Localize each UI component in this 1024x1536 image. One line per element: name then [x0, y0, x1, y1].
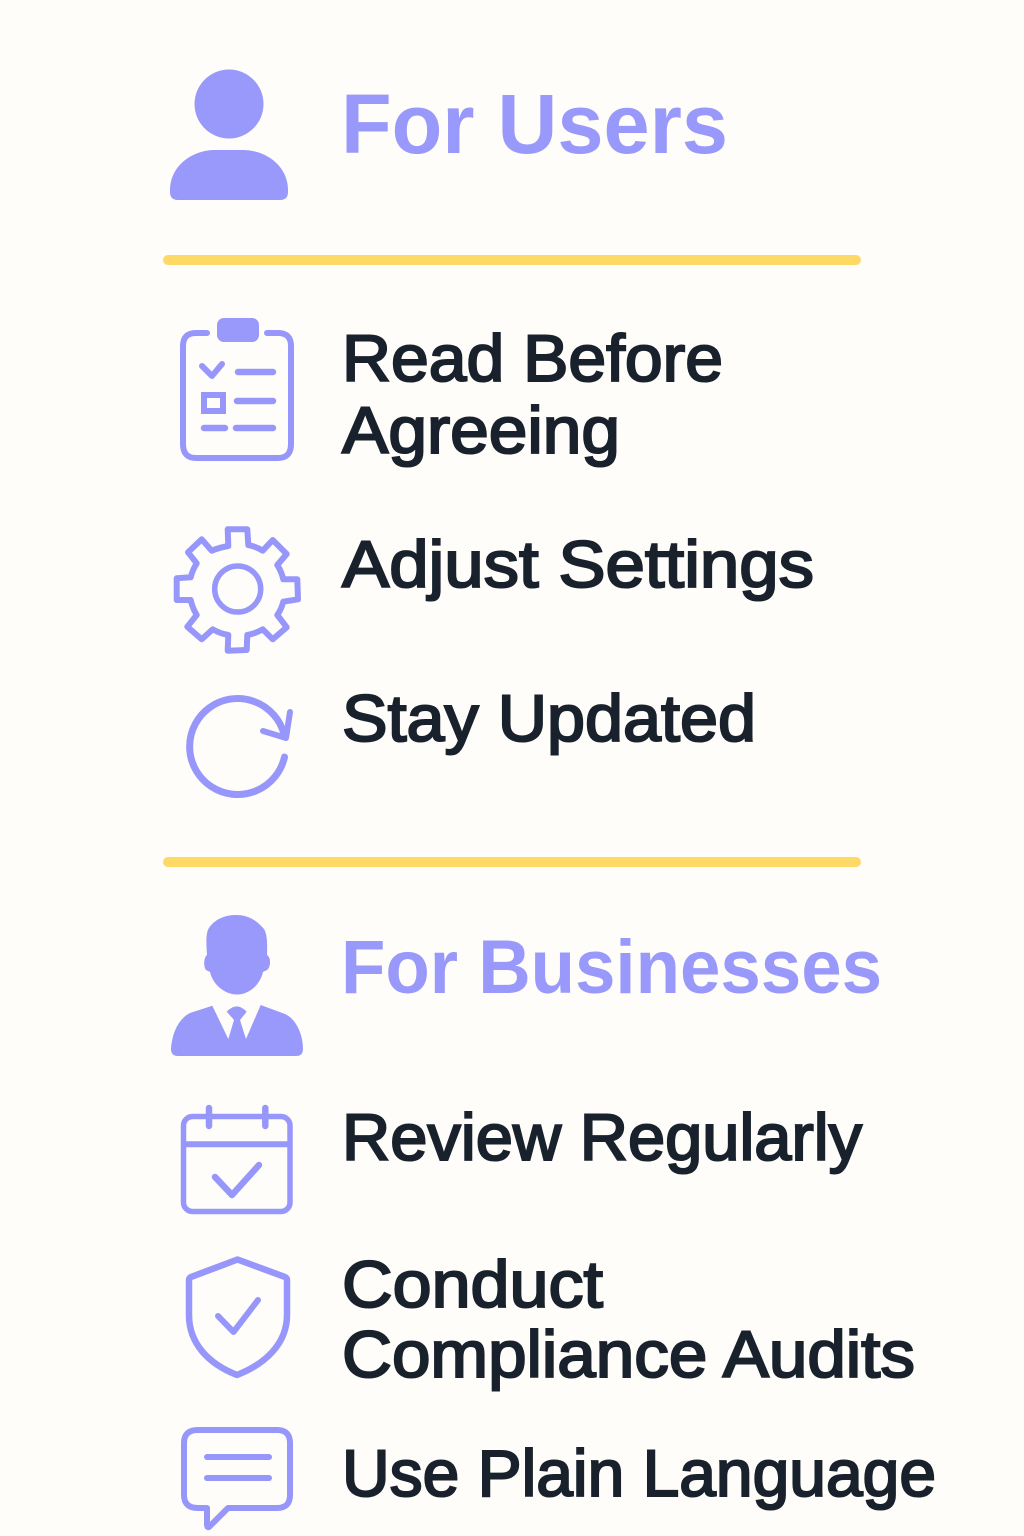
text: Read Before Agreeing: Read Before	[342, 321, 723, 395]
heading: For Users: For Users	[341, 77, 728, 171]
heading: For Businesses: For Businesses	[341, 925, 882, 1010]
icon: businessman	[171, 915, 303, 1056]
text: Read Before Agreeing: Agreeing	[342, 393, 620, 467]
text: Use Plain Language: Use Plain Language	[342, 1436, 936, 1510]
icon: user	[170, 70, 288, 200]
text: Conduct Compliance Audits: Conduct	[342, 1247, 603, 1321]
text: Conduct Compliance Audits	[342, 1247, 915, 1391]
icon: refresh arrow	[190, 699, 290, 795]
icon: gear	[177, 529, 298, 651]
text: Read Before Agreeing	[342, 321, 723, 467]
icon: clipboard checklist	[183, 318, 291, 458]
text: Review Regularly: Review Regularly	[342, 1100, 862, 1174]
text: Adjust Settings: Adjust Settings	[342, 527, 814, 601]
text: Conduct Compliance Audits: Compliance Audits	[342, 1317, 915, 1391]
text: Stay Updated: Stay Updated	[342, 681, 756, 755]
icon: speech bubble	[184, 1430, 290, 1527]
icon: shield with check	[189, 1260, 287, 1375]
icon: calendar with check	[184, 1108, 290, 1212]
